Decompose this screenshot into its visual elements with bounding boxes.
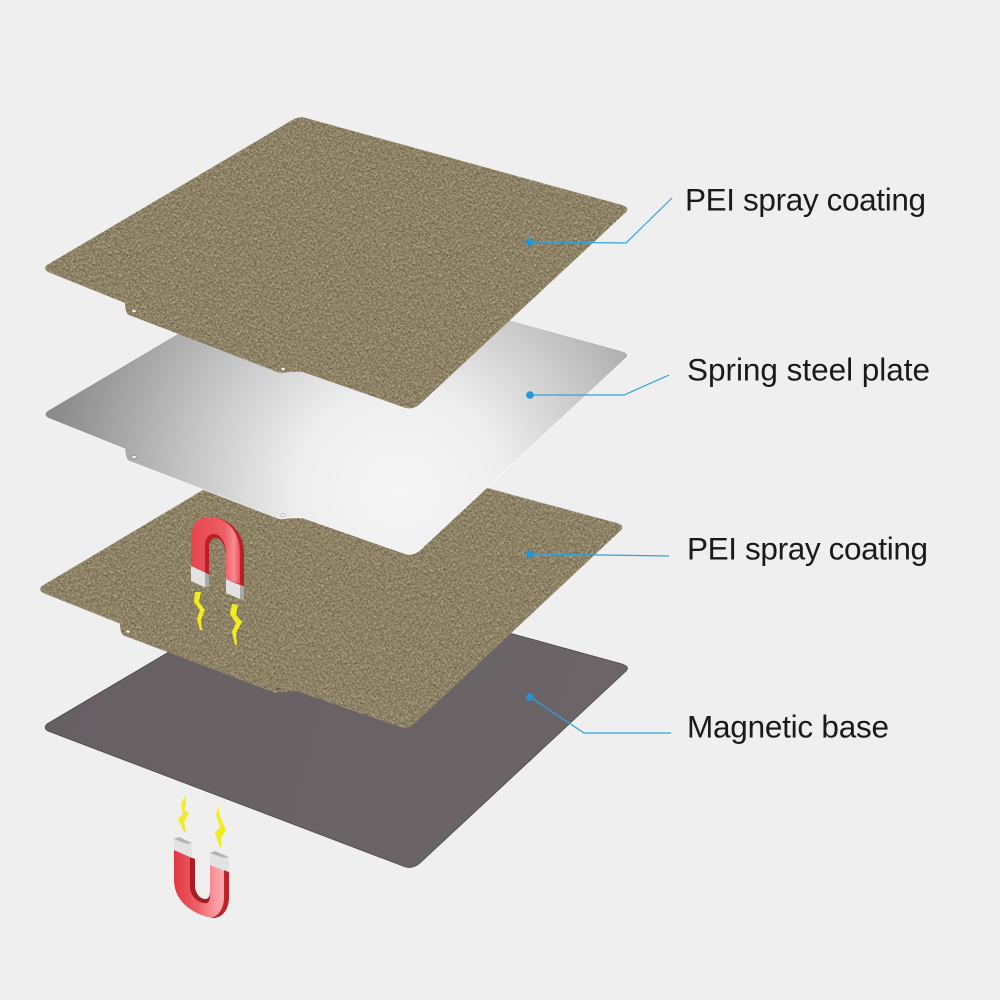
callout: lower PEI spray coating [526, 530, 928, 566]
callout: magnetic base: Magnetic base [687, 708, 889, 744]
icon: lower lightning bolts [178, 796, 226, 847]
callout: top PEI spray coating: PEI spray coating [685, 182, 926, 218]
icon: upper magnet [191, 517, 244, 600]
callout: top PEI spray coating [526, 182, 926, 246]
icon: upper lightning bolts [194, 592, 242, 645]
panel: magnetic base plate [45, 576, 627, 867]
panel: lower PEI spray coated plate [40, 435, 622, 729]
icon: lower magnet [174, 837, 229, 918]
callout: magnetic base [526, 693, 889, 744]
callout: spring steel plate [526, 352, 930, 399]
panel: spring steel plate [45, 263, 627, 554]
callout: lower PEI spray coating: PEI spray coating [687, 530, 928, 566]
callout: spring steel plate: Spring steel plate [687, 352, 930, 388]
panel: top PEI spray coated plate [45, 117, 627, 408]
